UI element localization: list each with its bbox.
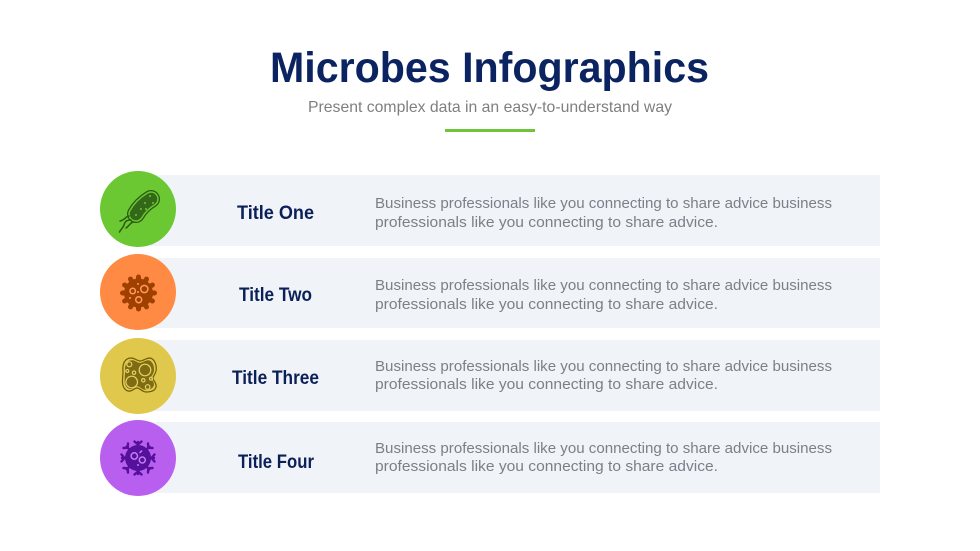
row 2 panel bbox=[150, 258, 880, 328]
row 3 panel bbox=[150, 340, 880, 411]
row 3 circle bbox=[100, 338, 176, 414]
row 2: title two bbox=[100, 254, 880, 330]
row 4 panel bbox=[150, 422, 880, 493]
icon: dividing cell bbox=[122, 358, 156, 392]
icon: bacterium bbox=[120, 195, 154, 232]
row 3: title three bbox=[100, 338, 880, 414]
row 1 text: Business professionals like you connecting to share advice business bbox=[375, 195, 832, 212]
row 1 circle bbox=[100, 171, 176, 247]
row 2 text: Business professionals like you connecting to share advice business bbox=[375, 277, 832, 294]
row 4: title four bbox=[100, 420, 880, 496]
row 1 text: professionals like you connecting to share advice. bbox=[375, 214, 718, 231]
row 4 heading: Title Four bbox=[238, 452, 315, 473]
row 2 heading: Title Two bbox=[239, 285, 312, 306]
row 3 text: Business professionals like you connecting to share advice business bbox=[375, 358, 832, 375]
row 2 circle bbox=[100, 254, 176, 330]
row 3 heading: Title Three bbox=[232, 368, 319, 389]
accent underline bbox=[445, 129, 535, 132]
row 1: title one bbox=[100, 171, 880, 247]
row 4 text: professionals like you connecting to share advice. bbox=[375, 458, 718, 475]
row 4 circle bbox=[100, 420, 176, 496]
row 1 panel bbox=[150, 175, 880, 246]
icon: spiky microbe bbox=[122, 277, 154, 309]
icon: virus bbox=[122, 442, 154, 474]
row 4 text: Business professionals like you connecting to share advice business bbox=[375, 440, 832, 457]
row 2 text: professionals like you connecting to share advice. bbox=[375, 296, 718, 313]
title: Microbes Infographics bbox=[270, 45, 709, 92]
row 3 text: professionals like you connecting to share advice. bbox=[375, 376, 718, 393]
subtitle: Present complex data in an easy-to-understand way bbox=[308, 99, 672, 116]
row 1 heading: Title One bbox=[237, 203, 314, 224]
